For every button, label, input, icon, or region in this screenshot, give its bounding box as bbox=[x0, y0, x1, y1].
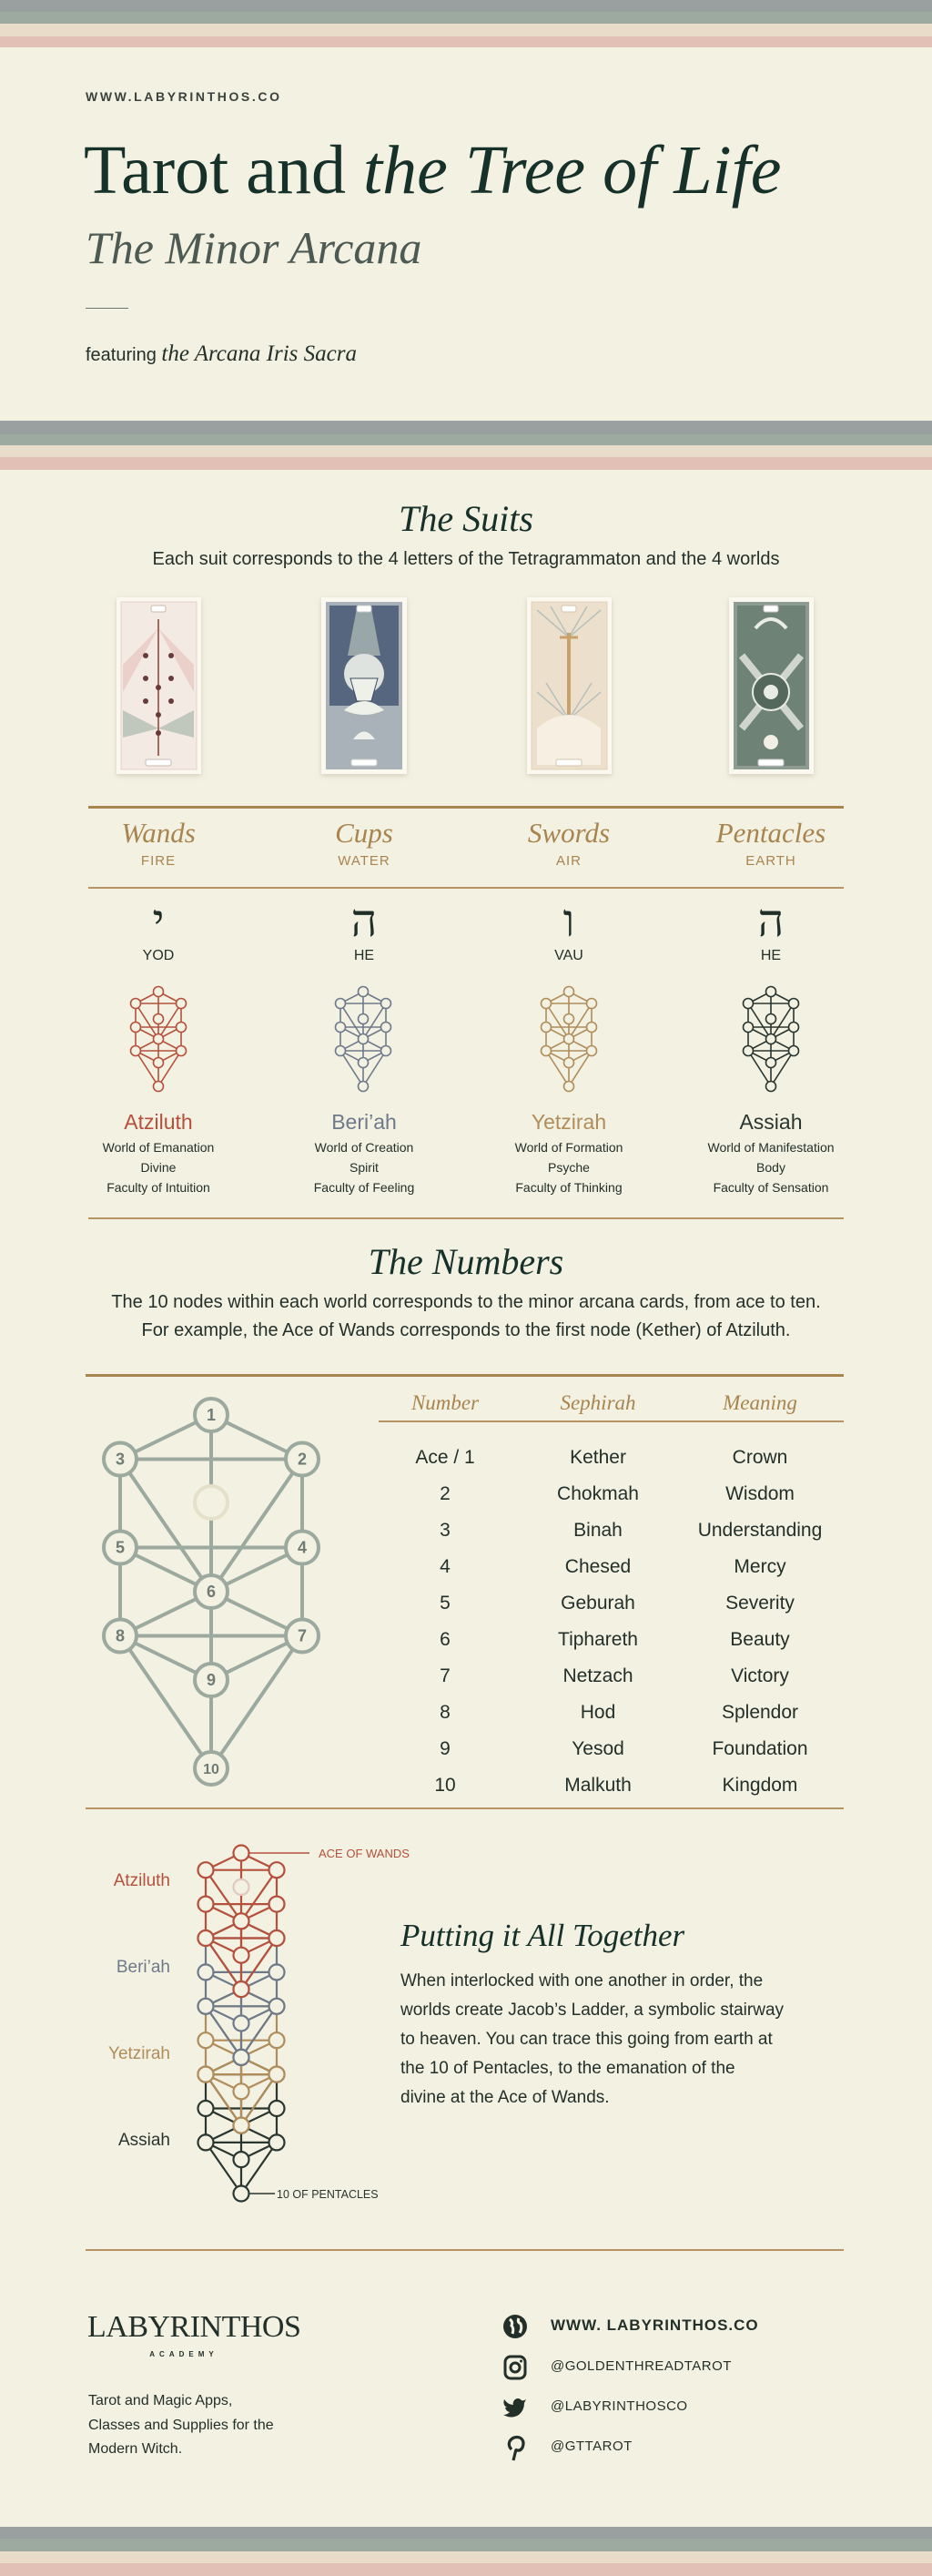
heading: The Numbers: The Numbers bbox=[369, 1241, 563, 1282]
table: numbers, sephirah, meaning: Meaning bbox=[723, 1391, 797, 1414]
table: numbers, sephirah, meaning: Binah bbox=[573, 1520, 623, 1541]
footer social links bbox=[503, 2315, 759, 2460]
table header: Number bbox=[411, 1391, 479, 1414]
world: atziluth bbox=[102, 1110, 214, 1195]
table rows: 6 bbox=[440, 1629, 451, 1650]
ladder labels: Beri’ah bbox=[116, 1958, 170, 1977]
table rows: 2 bbox=[440, 1483, 451, 1504]
paragraph: putting it all together: worlds create Jacob’s Ladder, a symbolic stairway bbox=[400, 2001, 784, 2020]
world: yetzirah bbox=[515, 1110, 623, 1195]
table rows: 9 bbox=[440, 1738, 451, 1759]
large tree of life diagram: 9 bbox=[207, 1671, 216, 1689]
table: numbers, sephirah, meaning: Netzach bbox=[562, 1665, 633, 1686]
tree: atziluth bbox=[198, 1845, 284, 1997]
jacob's ladder diagram bbox=[108, 1844, 410, 2203]
footer tagline bbox=[88, 2393, 274, 2457]
table rows: 5 bbox=[440, 1593, 451, 1614]
world: atziluth: World of Emanation bbox=[103, 1140, 214, 1155]
card: ace of swords bbox=[527, 597, 612, 774]
tree: beriah bbox=[198, 1913, 284, 2065]
suit: swords: AIR bbox=[556, 853, 582, 869]
world: atziluth: Atziluth bbox=[124, 1110, 193, 1134]
icon: beriah tree bbox=[335, 987, 391, 1091]
icon: pinterest bbox=[508, 2435, 525, 2460]
world: yetzirah: Yetzirah bbox=[532, 1110, 606, 1134]
paragraph: putting it all together: divine at the Ace of Wands. bbox=[400, 2088, 610, 2107]
suit: wands: FIRE bbox=[141, 853, 176, 869]
table: numbers, sephirah, meaning: Crown bbox=[733, 1447, 787, 1468]
card: ace of wands bbox=[116, 597, 201, 774]
table: numbers, sephirah, meaning: Wisdom bbox=[725, 1483, 795, 1504]
tree: yetzirah bbox=[198, 1981, 284, 2133]
table: numbers, sephirah, meaning: Severity bbox=[725, 1593, 795, 1614]
suit names row bbox=[121, 817, 826, 869]
bottom stripes bbox=[0, 2527, 932, 2576]
footer social links: @GOLDENTHREADTAROT bbox=[551, 2358, 732, 2374]
icon: globe bbox=[503, 2315, 527, 2338]
table: numbers, sephirah, meaning: Kether bbox=[570, 1447, 626, 1468]
letter: vau: VAU bbox=[554, 948, 583, 963]
world: atziluth: Faculty of Intuition bbox=[106, 1180, 210, 1195]
icon: instagram bbox=[504, 2355, 526, 2380]
numbers description: For example, the Ace of Wands corresponds to the first node (Kether) of Atziluth. bbox=[142, 1320, 790, 1340]
large tree of life diagram: 7 bbox=[298, 1626, 307, 1644]
table: numbers, sephirah, meaning: Yesod bbox=[572, 1738, 624, 1759]
table rows: Ace / 1 bbox=[415, 1447, 475, 1468]
letter: yod: י bbox=[152, 894, 165, 947]
world: yetzirah: Psyche bbox=[548, 1160, 590, 1175]
world: assiah: Faculty of Sensation bbox=[714, 1180, 828, 1195]
letter: he: ה bbox=[758, 894, 784, 947]
world: beriah: Beri’ah bbox=[331, 1110, 397, 1134]
suit: wands: Wands bbox=[121, 817, 196, 849]
table: numbers, sephirah, meaning: Victory bbox=[731, 1665, 789, 1686]
world: assiah: Assiah bbox=[739, 1110, 803, 1134]
heading: putting it all together: Putting it All Together bbox=[400, 1918, 684, 1953]
table: numbers, sephirah, meaning: Mercy bbox=[734, 1556, 786, 1577]
table rows: 7 bbox=[440, 1665, 451, 1686]
table: numbers, sephirah, meaning: Tiphareth bbox=[558, 1629, 638, 1650]
footer logo: ACADEMY bbox=[149, 2350, 218, 2358]
suit: pentacles bbox=[715, 817, 826, 869]
world: assiah: Body bbox=[756, 1160, 785, 1175]
footer social links: @LABYRINTHOSCO bbox=[551, 2398, 688, 2414]
suit: cups: Cups bbox=[335, 817, 393, 849]
world: beriah: Faculty of Feeling bbox=[314, 1180, 414, 1195]
table: numbers, sephirah, meaning: Foundation bbox=[712, 1738, 808, 1759]
ladder labels: Assiah bbox=[118, 2131, 170, 2150]
card: ace of pentacles bbox=[729, 597, 814, 774]
letter: yod bbox=[143, 894, 174, 963]
footer social links: @GTTAROT bbox=[551, 2439, 633, 2454]
table rows: 10 bbox=[434, 1775, 456, 1796]
middle stripes bbox=[0, 421, 932, 470]
large tree of life diagram: 5 bbox=[116, 1539, 125, 1557]
world: beriah: Spirit bbox=[350, 1160, 379, 1175]
footer tagline: Classes and Supplies for the bbox=[88, 2417, 274, 2433]
icon: yetzirah tree bbox=[541, 987, 597, 1091]
table rows: 3 bbox=[440, 1520, 451, 1541]
large tree of life diagram bbox=[102, 1397, 320, 1787]
callout: 10 of pentacles: 10 OF PENTACLES bbox=[277, 2188, 379, 2201]
suit: swords bbox=[528, 817, 610, 869]
top stripes bbox=[0, 0, 932, 47]
table: numbers, sephirah, meaning: Understanding bbox=[698, 1520, 822, 1541]
footer tagline: Modern Witch. bbox=[88, 2441, 182, 2457]
world: yetzirah: Faculty of Thinking bbox=[515, 1180, 623, 1195]
footer social links: WWW. LABYRINTHOS.CO bbox=[551, 2316, 759, 2334]
suit: cups: WATER bbox=[338, 853, 390, 869]
table: numbers, sephirah, meaning: Splendor bbox=[722, 1702, 798, 1723]
letter: yod: YOD bbox=[143, 948, 174, 963]
hebrew letters row bbox=[143, 894, 784, 963]
letter: vau: ו bbox=[563, 894, 574, 947]
cards row bbox=[115, 597, 816, 778]
letter: vau bbox=[554, 894, 583, 963]
table: numbers, sephirah, meaning: Beauty bbox=[730, 1629, 790, 1650]
footer logo bbox=[87, 2310, 300, 2358]
numbers description bbox=[111, 1292, 821, 1340]
icon: assiah tree bbox=[743, 987, 799, 1091]
suit: wands bbox=[121, 817, 196, 869]
worlds row bbox=[102, 1110, 835, 1195]
large tree of life diagram: 8 bbox=[116, 1626, 125, 1644]
footer tagline: Tarot and Magic Apps, bbox=[88, 2393, 232, 2408]
table: numbers, sephirah, meaning: Malkuth bbox=[564, 1775, 632, 1796]
icon: atziluth tree bbox=[131, 987, 186, 1091]
suits description: Each suit corresponds to the 4 letters of the Tetragrammaton and the 4 worlds bbox=[153, 549, 779, 569]
paragraph: putting it all together: the 10 of Pentacles, to the emanation of the bbox=[400, 2059, 735, 2078]
tree: assiah bbox=[198, 2050, 284, 2202]
icon: twitter bbox=[503, 2398, 526, 2417]
world: yetzirah: World of Formation bbox=[515, 1140, 623, 1155]
heading: The Suits: The Suits bbox=[399, 498, 533, 539]
world: beriah: World of Creation bbox=[315, 1140, 413, 1155]
paragraph: putting it all together: to heaven. You can trace this going from earth at bbox=[400, 2030, 773, 2049]
table: numbers, sephirah, meaning: Chokmah bbox=[557, 1483, 639, 1504]
ladder labels: Yetzirah bbox=[108, 2044, 170, 2063]
large tree of life diagram: 1 bbox=[207, 1406, 216, 1424]
letter: he: HE bbox=[761, 948, 781, 963]
large tree of life diagram: 2 bbox=[298, 1450, 307, 1468]
footer logo: LABYRINTHOS bbox=[87, 2310, 300, 2344]
suit: pentacles: Pentacles bbox=[716, 817, 826, 849]
table: numbers, sephirah, meaning: Sephirah bbox=[560, 1391, 636, 1414]
card: ace of chalices bbox=[321, 597, 407, 774]
small trees row bbox=[129, 985, 799, 1093]
numbers description: The 10 nodes within each world corresponds to the minor arcana cards, from ace to ten. bbox=[111, 1292, 821, 1312]
world: assiah: World of Manifestation bbox=[707, 1140, 835, 1155]
world: assiah bbox=[707, 1110, 835, 1195]
ladder labels bbox=[108, 1871, 170, 2150]
paragraph: putting it all together bbox=[400, 1971, 784, 2107]
table: numbers, sephirah, meaning: Geburah bbox=[561, 1593, 635, 1614]
suit: swords: Swords bbox=[528, 817, 610, 849]
large tree of life diagram: 3 bbox=[116, 1450, 125, 1468]
paragraph: putting it all together: When interlocked with one another in order, the bbox=[400, 1971, 763, 1991]
featuring line: featuring the Arcana Iris Sacra bbox=[86, 341, 357, 366]
table: numbers, sephirah, meaning: Kingdom bbox=[723, 1775, 797, 1796]
table rows: 8 bbox=[440, 1702, 451, 1723]
title: Tarot and the Tree of Life bbox=[84, 132, 782, 209]
table: numbers, sephirah, meaning: Hod bbox=[581, 1702, 615, 1723]
suit: cups bbox=[335, 817, 393, 869]
letter: he: HE bbox=[354, 948, 374, 963]
world: beriah bbox=[314, 1110, 414, 1195]
large tree of life diagram: 4 bbox=[298, 1539, 307, 1557]
subtitle: The Minor Arcana bbox=[86, 222, 421, 273]
letter: he: ה bbox=[351, 894, 377, 947]
large tree of life diagram: 6 bbox=[207, 1583, 216, 1601]
table rows bbox=[415, 1447, 475, 1796]
world: atziluth: Divine bbox=[141, 1160, 176, 1175]
large tree of life diagram: 10 bbox=[203, 1762, 219, 1777]
suit: pentacles: EARTH bbox=[745, 853, 796, 869]
table: numbers, sephirah, meaning bbox=[379, 1391, 844, 1796]
ladder labels: Atziluth bbox=[114, 1871, 170, 1890]
table: numbers, sephirah, meaning: Chesed bbox=[565, 1556, 631, 1577]
callout: ace of wands: ACE OF WANDS bbox=[319, 1847, 410, 1860]
site url: WWW.LABYRINTHOS.CO bbox=[86, 89, 282, 104]
table rows: 4 bbox=[440, 1556, 451, 1577]
